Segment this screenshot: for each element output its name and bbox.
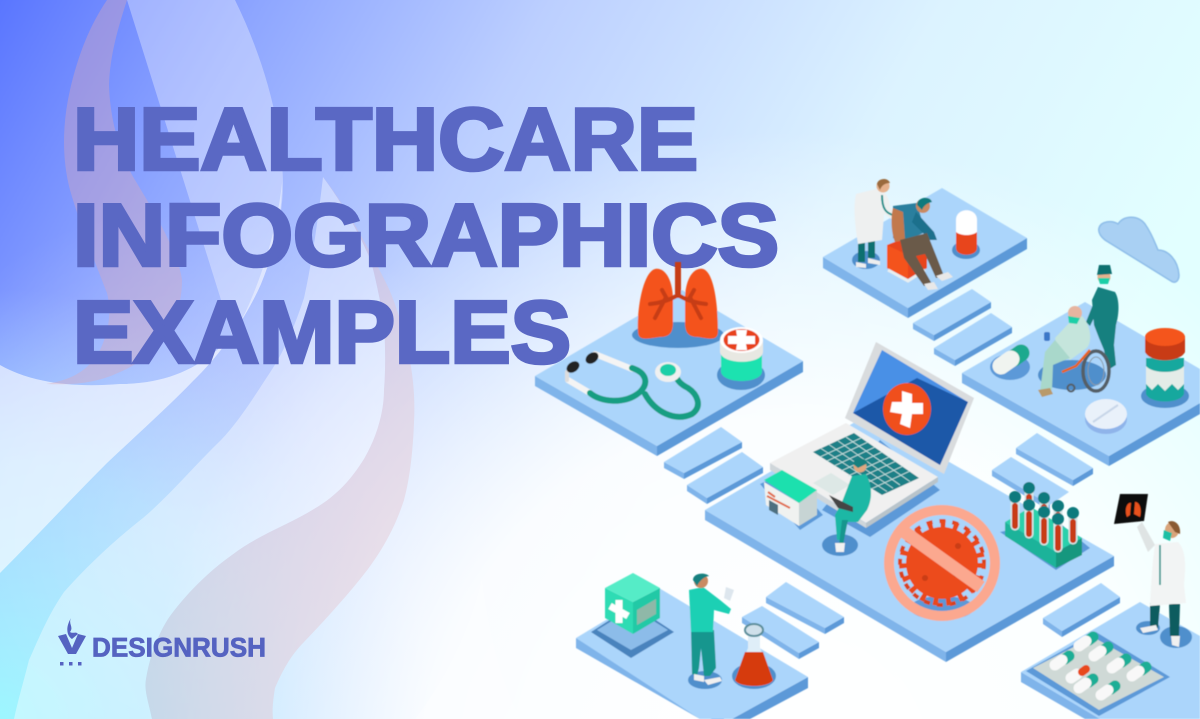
icon: red and white capsule <box>952 210 980 259</box>
icon: virus with prohibition sign <box>889 510 995 620</box>
figure: woman with laptop <box>822 459 871 556</box>
platform: centre laptop <box>705 415 1114 662</box>
platform: wheelchair <box>962 302 1200 466</box>
icon: red cross circle <box>883 383 931 435</box>
wave: central pale sweep <box>14 177 385 719</box>
tile 4 <box>934 313 1012 366</box>
tile 6 <box>992 457 1069 511</box>
logo: DesignRush <box>58 618 266 666</box>
icon: stethoscope <box>564 350 698 417</box>
title: INFOGRAPHICS <box>73 186 779 284</box>
wave: upper pale flame <box>0 0 283 573</box>
icon: round pill <box>1085 399 1127 434</box>
icon: test tube rack <box>1000 482 1090 570</box>
icon: medicine jar <box>1141 328 1189 408</box>
icon: DesignRush flame and V <box>58 618 86 666</box>
laptop shadow <box>822 440 940 537</box>
icon: x-ray film <box>1114 494 1148 524</box>
platform: bottom left <box>576 588 808 719</box>
icon: lungs <box>632 262 724 348</box>
figure: seated patient on red stool <box>887 198 953 290</box>
icon: teal white capsule <box>990 353 1030 380</box>
figure: doctor with stethoscope <box>852 179 899 269</box>
platform: bottom right <box>1021 602 1200 719</box>
keyboard <box>813 433 919 495</box>
title: HEALTHCARE <box>73 90 698 188</box>
wave: pink right ribbon <box>145 177 414 719</box>
wave: lower pale band <box>0 183 282 573</box>
background wave shapes <box>0 0 520 719</box>
tile 8 <box>742 606 819 659</box>
tile 2 <box>687 452 763 504</box>
laptop base <box>770 423 938 528</box>
connector tiles <box>664 289 1120 659</box>
logo wordmark: DESIGNRUSH <box>92 632 266 662</box>
tile 9 <box>1043 583 1120 637</box>
icon: flask <box>732 624 776 689</box>
tile 7 <box>766 582 844 634</box>
figure: surgeon with phone <box>688 574 734 689</box>
icon: green medicine box <box>760 470 823 530</box>
icon: red-cross jar <box>717 327 765 390</box>
platform: lungs <box>535 290 803 456</box>
tile 5 <box>1016 433 1093 486</box>
platform: top doctor <box>823 188 1027 318</box>
test tubes <box>1009 482 1079 548</box>
tile 1 <box>664 427 742 479</box>
icon: pill blister pack <box>1026 632 1170 716</box>
wave: pink left ribbon <box>46 0 182 384</box>
title <box>73 90 779 382</box>
isometric healthcare illustration <box>535 179 1200 719</box>
capsule rows <box>1055 637 1146 695</box>
figure: patient in wheelchair <box>1038 306 1109 397</box>
icon: cloud <box>1099 217 1179 282</box>
title: EXAMPLES <box>73 282 571 382</box>
tile 3 <box>913 289 991 341</box>
figure: doctor with x-ray <box>1114 494 1192 648</box>
wave: faint bottom flame <box>415 578 520 719</box>
icon: mint cross cube <box>591 573 674 658</box>
laptop screen <box>845 342 974 474</box>
figure: nurse pushing wheelchair <box>1086 265 1118 370</box>
laptop <box>770 342 974 537</box>
